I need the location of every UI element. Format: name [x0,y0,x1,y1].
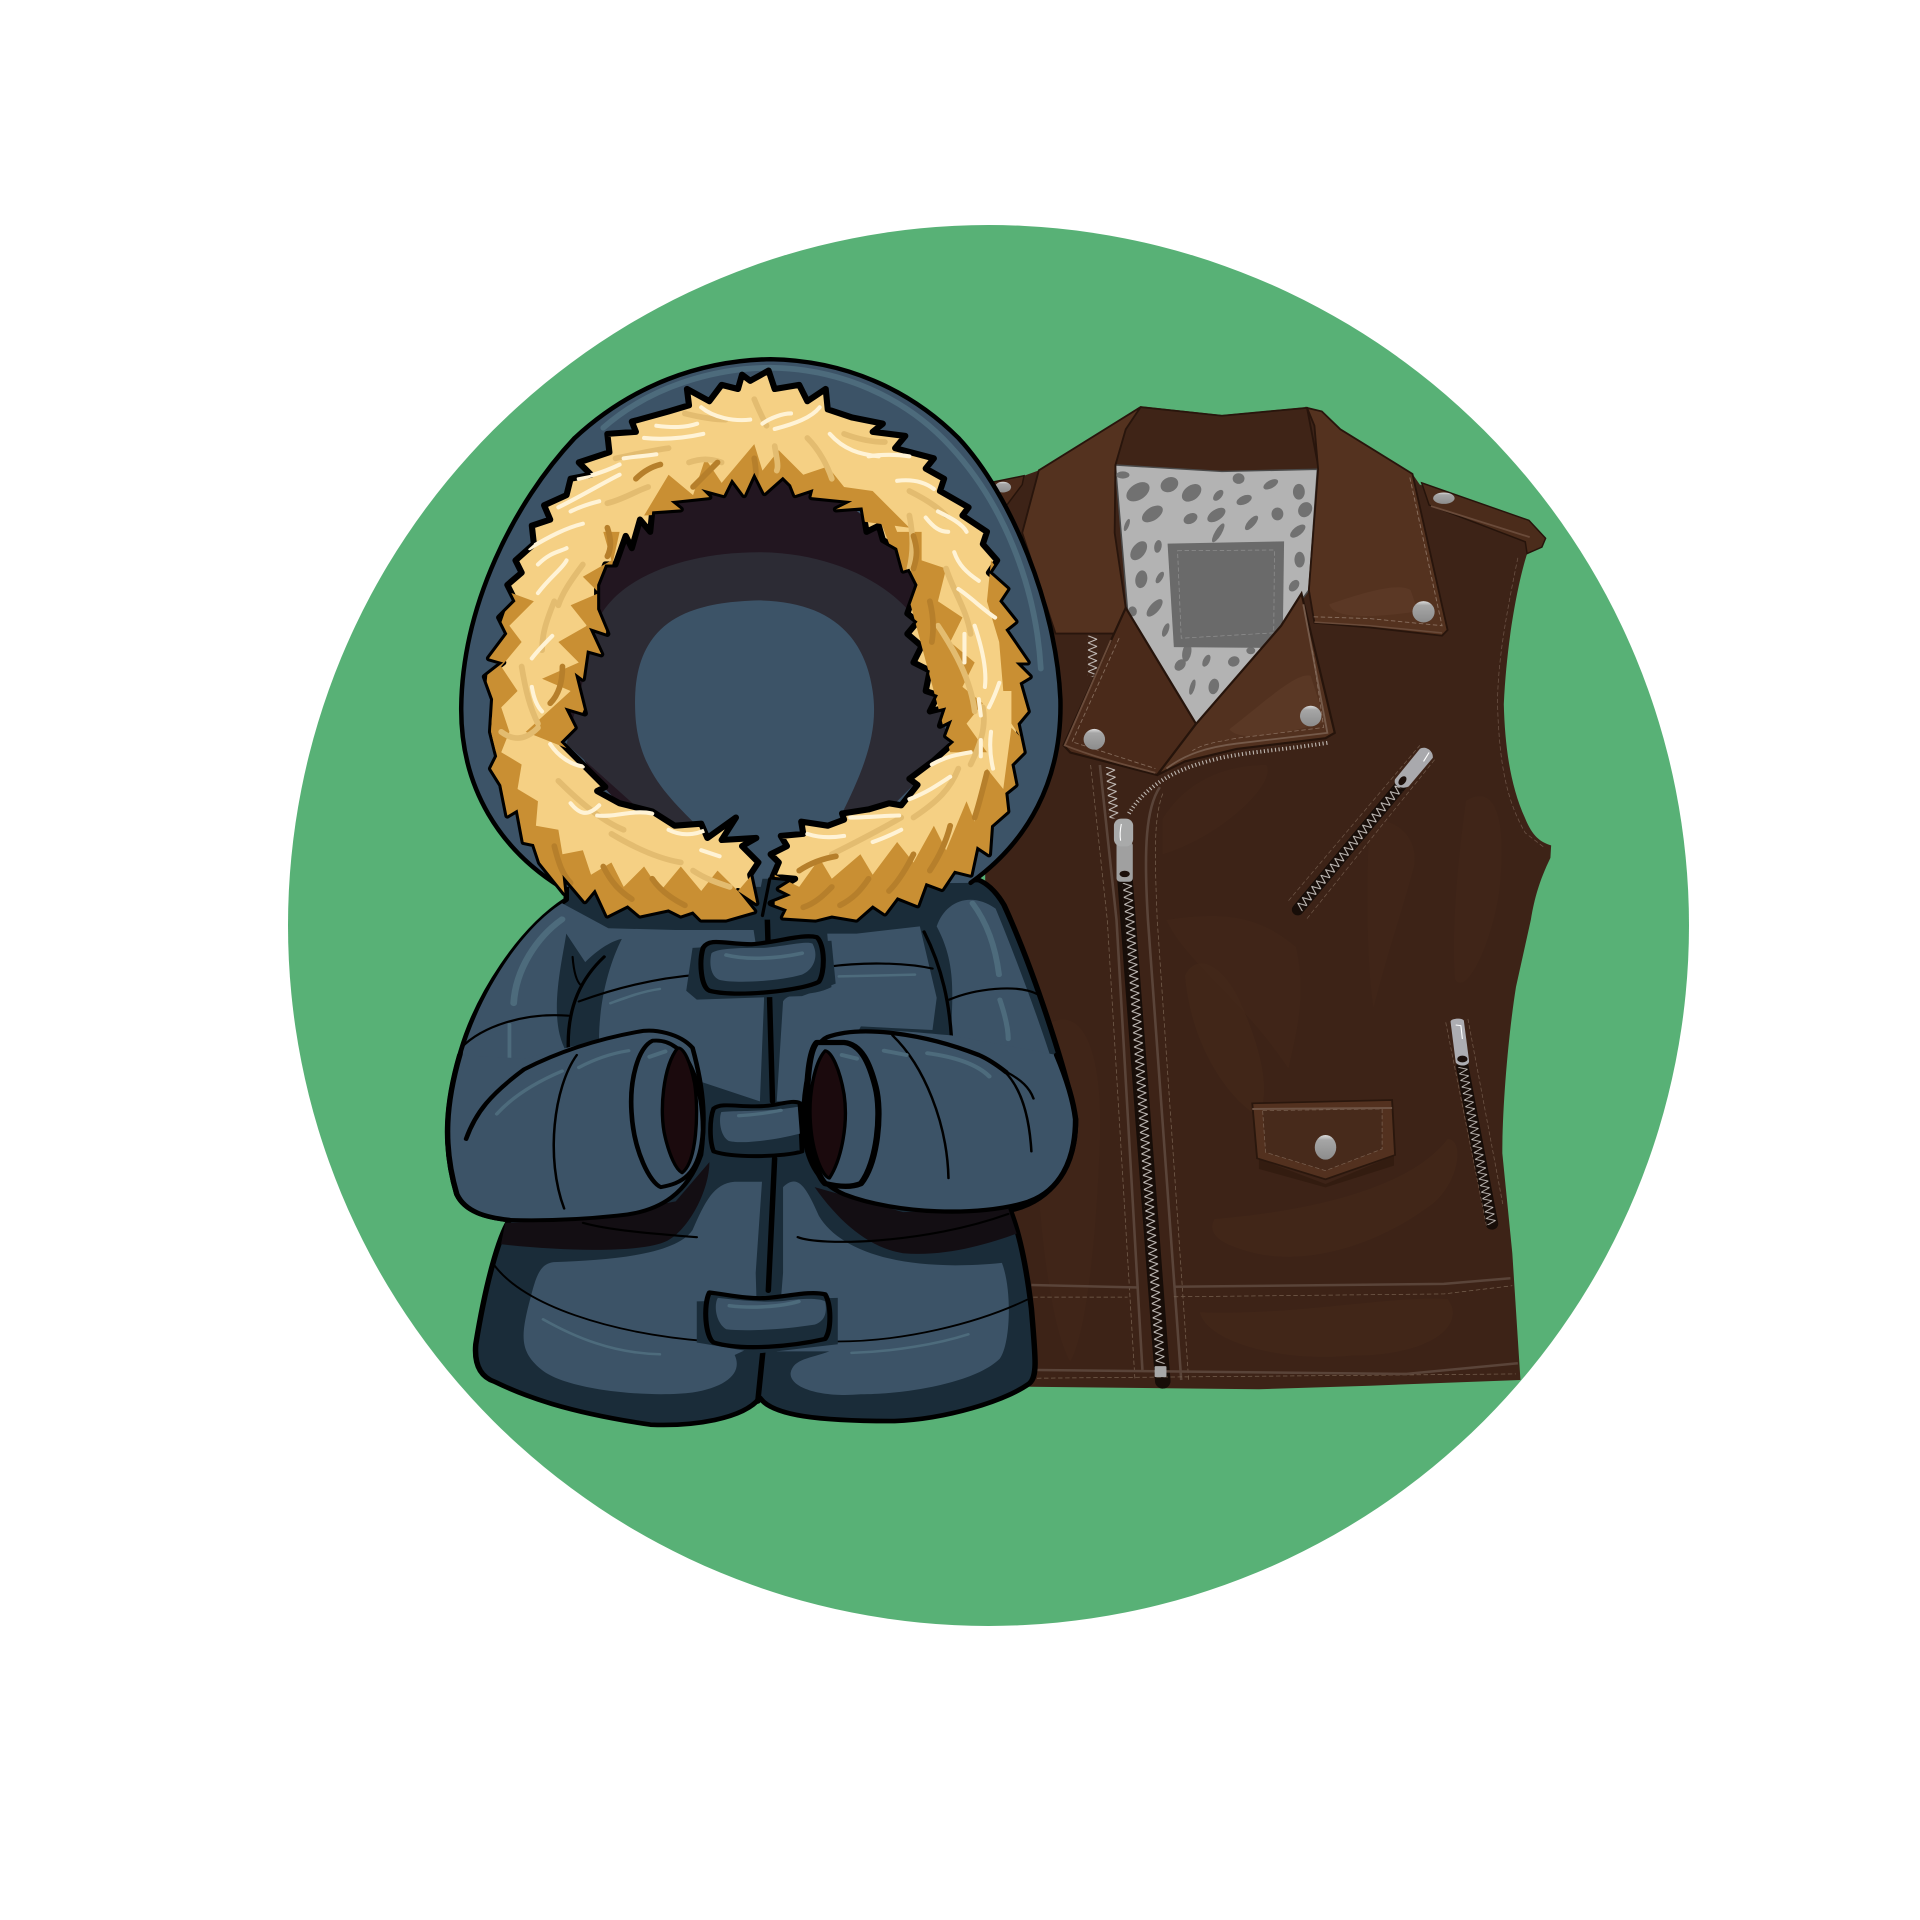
darkest shadow right [815,1187,1017,1254]
right cuff [807,1042,878,1186]
right shoulder panel [937,900,1067,1116]
left sleeve [448,1031,703,1220]
left shoulder panel [459,903,764,1101]
neck label patch [1168,541,1284,648]
collar stand [1115,407,1319,473]
background: green circle [288,225,1689,1626]
left shoulder rivet [995,482,1011,492]
main zip teeth [1122,883,1165,1364]
side zip pull [1451,1019,1469,1066]
right shoulder strap [1422,483,1546,554]
right sleeve [804,1031,1076,1212]
jacket highlights [509,903,1008,1354]
left collar leaf [1022,407,1141,634]
hood shell fill [461,359,1060,887]
hood interior [562,475,950,854]
puffer jacket [448,880,1076,1425]
jacket seam lines [461,880,1038,1401]
hood rim highlight [603,368,1041,669]
face area [635,600,874,887]
fur trim [477,371,1032,932]
lower right panel [777,1182,1009,1395]
left cuff opening [662,1048,697,1173]
hood inner lining [567,552,950,850]
hood with fur trim [461,359,1060,932]
lining spots [1116,471,1315,695]
placket stitching [1033,765,1516,1381]
left cuff [631,1041,703,1187]
main zip stop [1155,1366,1166,1377]
chest zip pull [1395,748,1433,788]
vest body [985,406,1551,1389]
left shoulder strap [985,476,1024,506]
leather texture upper [1035,765,1502,1361]
jacket silhouette [448,880,1076,1425]
fur dark streaks [550,458,987,907]
hood shell outline [461,359,1060,887]
upper zip teeth [1105,766,1119,819]
darkest shadow left [501,1162,709,1250]
right cuff opening [810,1051,845,1178]
pocket rivet [1315,1135,1336,1160]
left lapel [1064,608,1196,775]
fur tan streaks [501,399,984,887]
leather vest [985,406,1551,1389]
middle toggle [710,1102,802,1156]
placket seams [1100,765,1181,1380]
flap pocket [1252,1100,1395,1187]
side pocket zipper [1446,1019,1503,1226]
right collar leaf [1307,408,1448,636]
inner placket zip strip [1088,636,1097,677]
armhole stitching [1498,558,1544,847]
patterned lining [1115,465,1317,724]
lower left panel [524,1182,762,1394]
fur shading [477,399,1032,932]
fur light streaks [530,407,999,856]
top toggle [686,936,836,1000]
collar rivets [1084,601,1435,750]
bottom toggle [697,1292,838,1353]
leather texture lower [1185,963,1457,1357]
right torso panel [777,926,937,1101]
right lapel [1157,594,1335,775]
patch stitching [1178,550,1274,638]
main zip tape [1125,879,1163,1381]
main zip pull [1114,819,1133,882]
diagonal zip teeth under lapel [1128,743,1327,816]
chest pocket zipper [1289,745,1435,919]
illustration [288,225,1689,1626]
hem seams [1031,1278,1518,1374]
collar gap [754,879,791,920]
